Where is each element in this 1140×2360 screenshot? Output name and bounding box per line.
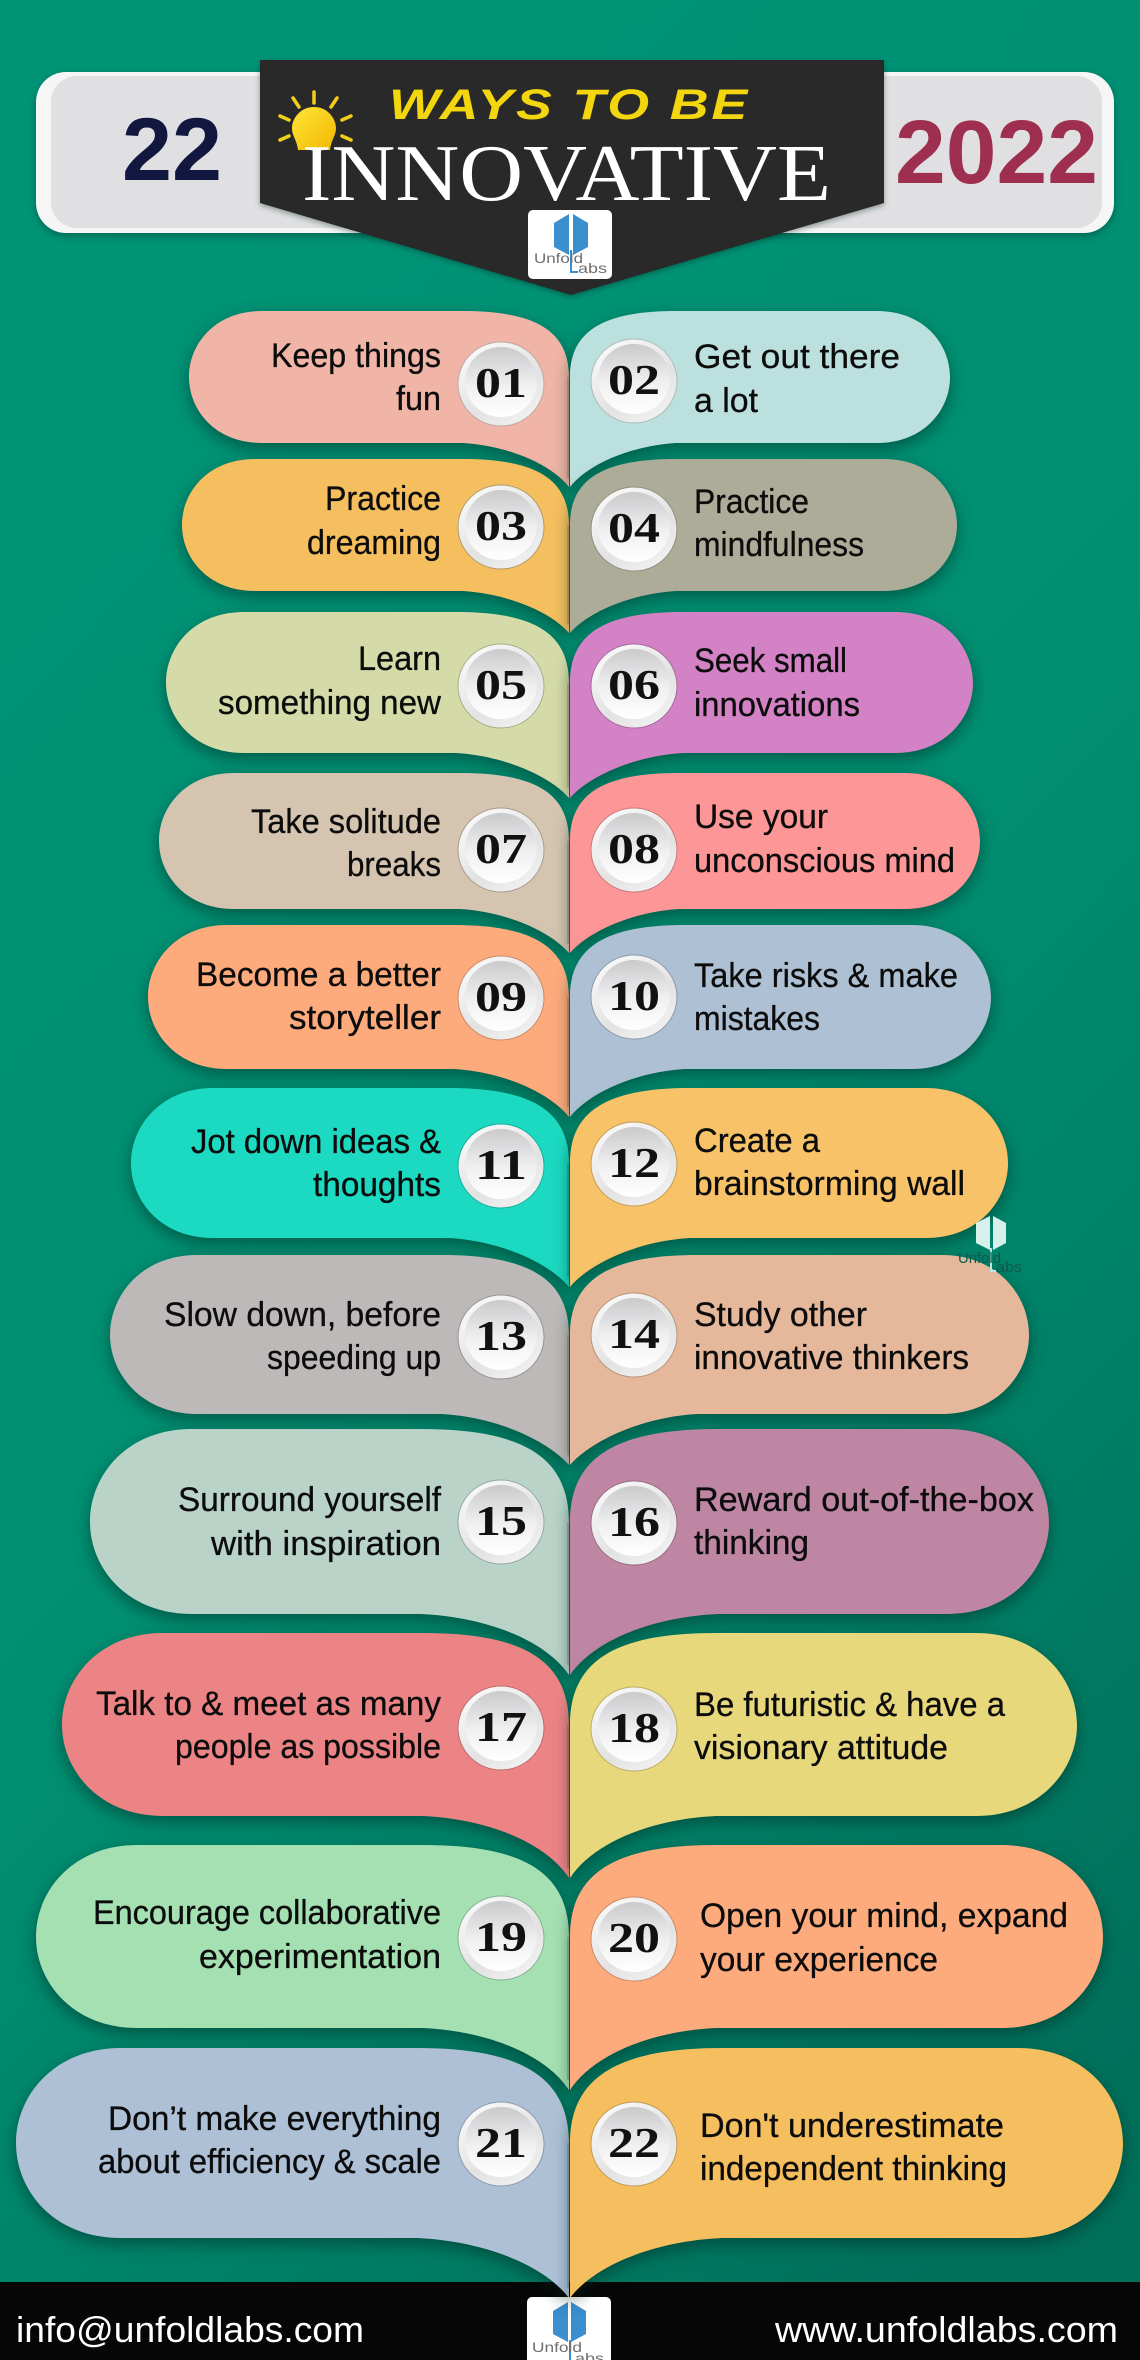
logo: Unfold Labs: Unfold (534, 250, 583, 266)
panel: 20 Open your mind, expand your experience: Open your mind, expand (700, 1897, 1068, 1935)
panel: 03 Practice dreaming: Practice (325, 480, 441, 518)
panel: 20 Open your mind, expand your experience: your experience (700, 1941, 938, 1979)
panel: 10 Take risks & make mistakes: mistakes (694, 1000, 820, 1038)
panel: 12 Create a brainstorming wall (570, 1088, 1008, 1287)
panel: 04 Practice mindfulness: 04 (608, 506, 660, 552)
panel: 02 Get out there a lot (570, 311, 950, 487)
panel: 06 Seek small innovations: 06 (608, 663, 660, 709)
panel: 19 Encourage collaborative experimentation: Encourage collaborative (93, 1894, 441, 1932)
title: ways to be: WAYS TO BE (389, 81, 750, 129)
watermark logo: abs (996, 1259, 1022, 1276)
footer website: www.unfoldlabs.com (774, 2309, 1118, 2350)
panel: 18 Be futuristic & have a visionary attitude: 18 (608, 1706, 660, 1752)
panel: 15 Surround yourself with inspiration (90, 1429, 569, 1675)
panel: 16 Reward out-of-the-box thinking: 16 (608, 1500, 660, 1546)
panel: 02 Get out there a lot: a lot (694, 382, 759, 420)
panel: 22 Don't underestimate independent thinking (570, 2048, 1123, 2298)
panel: 11 Jot down ideas & thoughts: thoughts (313, 1166, 441, 1204)
panel: 03 Practice dreaming (182, 459, 569, 633)
panel: 11 Jot down ideas & thoughts: Jot down ideas & (191, 1123, 441, 1161)
panel: 08 Use your unconscious mind: 08 (608, 827, 660, 873)
panel: 02 Get out there a lot: Get out there (694, 338, 900, 376)
panel: 06 Seek small innovations: Seek small (694, 642, 847, 680)
panel: 12 Create a brainstorming wall: Create a (694, 1122, 820, 1160)
panel: 02 Get out there a lot: 02 (608, 358, 660, 404)
panel: 22 Don't underestimate independent thinking: Don't underestimate (700, 2107, 1004, 2145)
panel: 03 Practice dreaming: 03 (475, 504, 527, 550)
panel: 07 Take solitude breaks (159, 773, 569, 953)
panel: 01 Keep things fun: Keep things (271, 337, 441, 375)
logo: Unfold Labs (528, 210, 612, 279)
panel: 09 Become a better storyteller: Become a better (196, 956, 441, 994)
heading: 22: 22 (122, 99, 222, 199)
panel: 13 Slow down, before speeding up: 13 (475, 1314, 527, 1360)
footer email: info@unfoldlabs.com (16, 2309, 364, 2350)
panel: 11 Jot down ideas & thoughts: 11 (475, 1143, 527, 1189)
panel: 08 Use your unconscious mind (570, 773, 980, 953)
panel: 04 Practice mindfulness: mindfulness (694, 526, 864, 564)
panel: 17 Talk to & meet as many people as possible: 17 (475, 1705, 527, 1751)
panel: 04 Practice mindfulness: Practice (694, 483, 809, 521)
panel: 10 Take risks & make mistakes: Take risks & make (694, 957, 958, 995)
title: innovative: INNOVATIVE (302, 130, 831, 218)
panel: 06 Seek small innovations (570, 612, 973, 798)
footer logo (527, 2297, 611, 2360)
panel: 13 Slow down, before speeding up (110, 1255, 569, 1465)
panel: 17 Talk to & meet as many people as possible: people as possible (175, 1728, 441, 1766)
panel: 17 Talk to & meet as many people as possible (62, 1633, 569, 1878)
panel: 20 Open your mind, expand your experience: 20 (608, 1916, 660, 1962)
panel: 09 Become a better storyteller: storyteller (289, 999, 441, 1037)
panel: 21 Don’t make everything about efficiency & scale: 21 (475, 2121, 527, 2167)
panel: 06 Seek small innovations: innovations (694, 686, 860, 724)
panel: 15 Surround yourself with inspiration: Surround yourself (178, 1481, 442, 1519)
panel: 22 Don't underestimate independent thinking: 22 (608, 2121, 660, 2167)
panel: 05 Learn something new (166, 612, 569, 798)
panel: 15 Surround yourself with inspiration: with inspiration (210, 1525, 441, 1563)
panel: 21 Don’t make everything about efficiency & scale: Don’t make everything (108, 2100, 441, 2138)
panel: 12 Create a brainstorming wall: 12 (608, 1141, 660, 1187)
panel: 14 Study other innovative thinkers: 14 (608, 1312, 660, 1358)
title ribbon (260, 60, 884, 295)
watermark logo (958, 1216, 1022, 1276)
panel: 01 Keep things fun: fun (396, 380, 441, 418)
panel: 07 Take solitude breaks: Take solitude (251, 803, 441, 841)
panel: 03 Practice dreaming: dreaming (307, 524, 441, 562)
panel: 19 Encourage collaborative experimentation (36, 1845, 569, 2090)
panel: 19 Encourage collaborative experimentation: experimentation (199, 1938, 441, 1976)
panel: 13 Slow down, before speeding up: speeding up (267, 1339, 441, 1377)
panel: 16 Reward out-of-the-box thinking (570, 1429, 1049, 1675)
panel: 16 Reward out-of-the-box thinking: thinking (694, 1524, 809, 1562)
panel: 14 Study other innovative thinkers (570, 1255, 1029, 1465)
panel: 05 Learn something new: 05 (475, 663, 527, 709)
panel: 15 Surround yourself with inspiration: 15 (475, 1499, 527, 1545)
panel: 08 Use your unconscious mind: unconscious mind (694, 842, 955, 880)
heading: 2022: 2022 (895, 103, 1098, 203)
icon: light bulb (280, 92, 351, 150)
panel: 20 Open your mind, expand your experience (570, 1845, 1103, 2090)
panel: 10 Take risks & make mistakes: 10 (608, 974, 660, 1020)
panel: 18 Be futuristic & have a visionary attitude: Be futuristic & have a (694, 1686, 1005, 1724)
panel: 18 Be futuristic & have a visionary attitude (570, 1633, 1077, 1878)
panel: 19 Encourage collaborative experimentation: 19 (475, 1915, 527, 1961)
footer bar (0, 2282, 1140, 2360)
panel: 16 Reward out-of-the-box thinking: Reward out-of-the-box (694, 1481, 1034, 1519)
panel: 05 Learn something new: something new (218, 684, 441, 722)
header banner (36, 72, 1114, 233)
panel: 13 Slow down, before speeding up: Slow down, before (164, 1296, 441, 1334)
panel: 14 Study other innovative thinkers: Study other (694, 1296, 867, 1334)
panel: 21 Don’t make everything about efficiency & scale: about efficiency & scale (98, 2143, 441, 2181)
panel: 18 Be futuristic & have a visionary attitude: visionary attitude (694, 1729, 948, 1767)
panel: 05 Learn something new: Learn (358, 640, 441, 678)
panel: 01 Keep things fun: 01 (475, 361, 527, 407)
panel: 17 Talk to & meet as many people as possible: Talk to & meet as many (96, 1685, 441, 1723)
panel: 09 Become a better storyteller: 09 (475, 975, 527, 1021)
panel: 04 Practice mindfulness (570, 459, 957, 633)
logo: Unfold Labs: abs (578, 260, 607, 276)
panel: 14 Study other innovative thinkers: innovative thinkers (694, 1339, 969, 1377)
panel: 12 Create a brainstorming wall: brainstorming wall (694, 1165, 965, 1203)
panel: 10 Take risks & make mistakes (570, 925, 991, 1117)
panel: 21 Don’t make everything about efficiency & scale (16, 2048, 569, 2298)
panel: 01 Keep things fun (189, 311, 569, 487)
panel: 09 Become a better storyteller (148, 925, 569, 1117)
footer logo: Unfold (532, 2339, 582, 2355)
panel: 11 Jot down ideas & thoughts (131, 1088, 569, 1287)
panel: 08 Use your unconscious mind: Use your (694, 798, 828, 836)
panel: 07 Take solitude breaks: breaks (347, 846, 441, 884)
panel: 07 Take solitude breaks: 07 (475, 827, 527, 873)
watermark logo: Unfold (958, 1250, 1001, 1267)
panel: 22 Don't underestimate independent thinking: independent thinking (700, 2150, 1007, 2188)
